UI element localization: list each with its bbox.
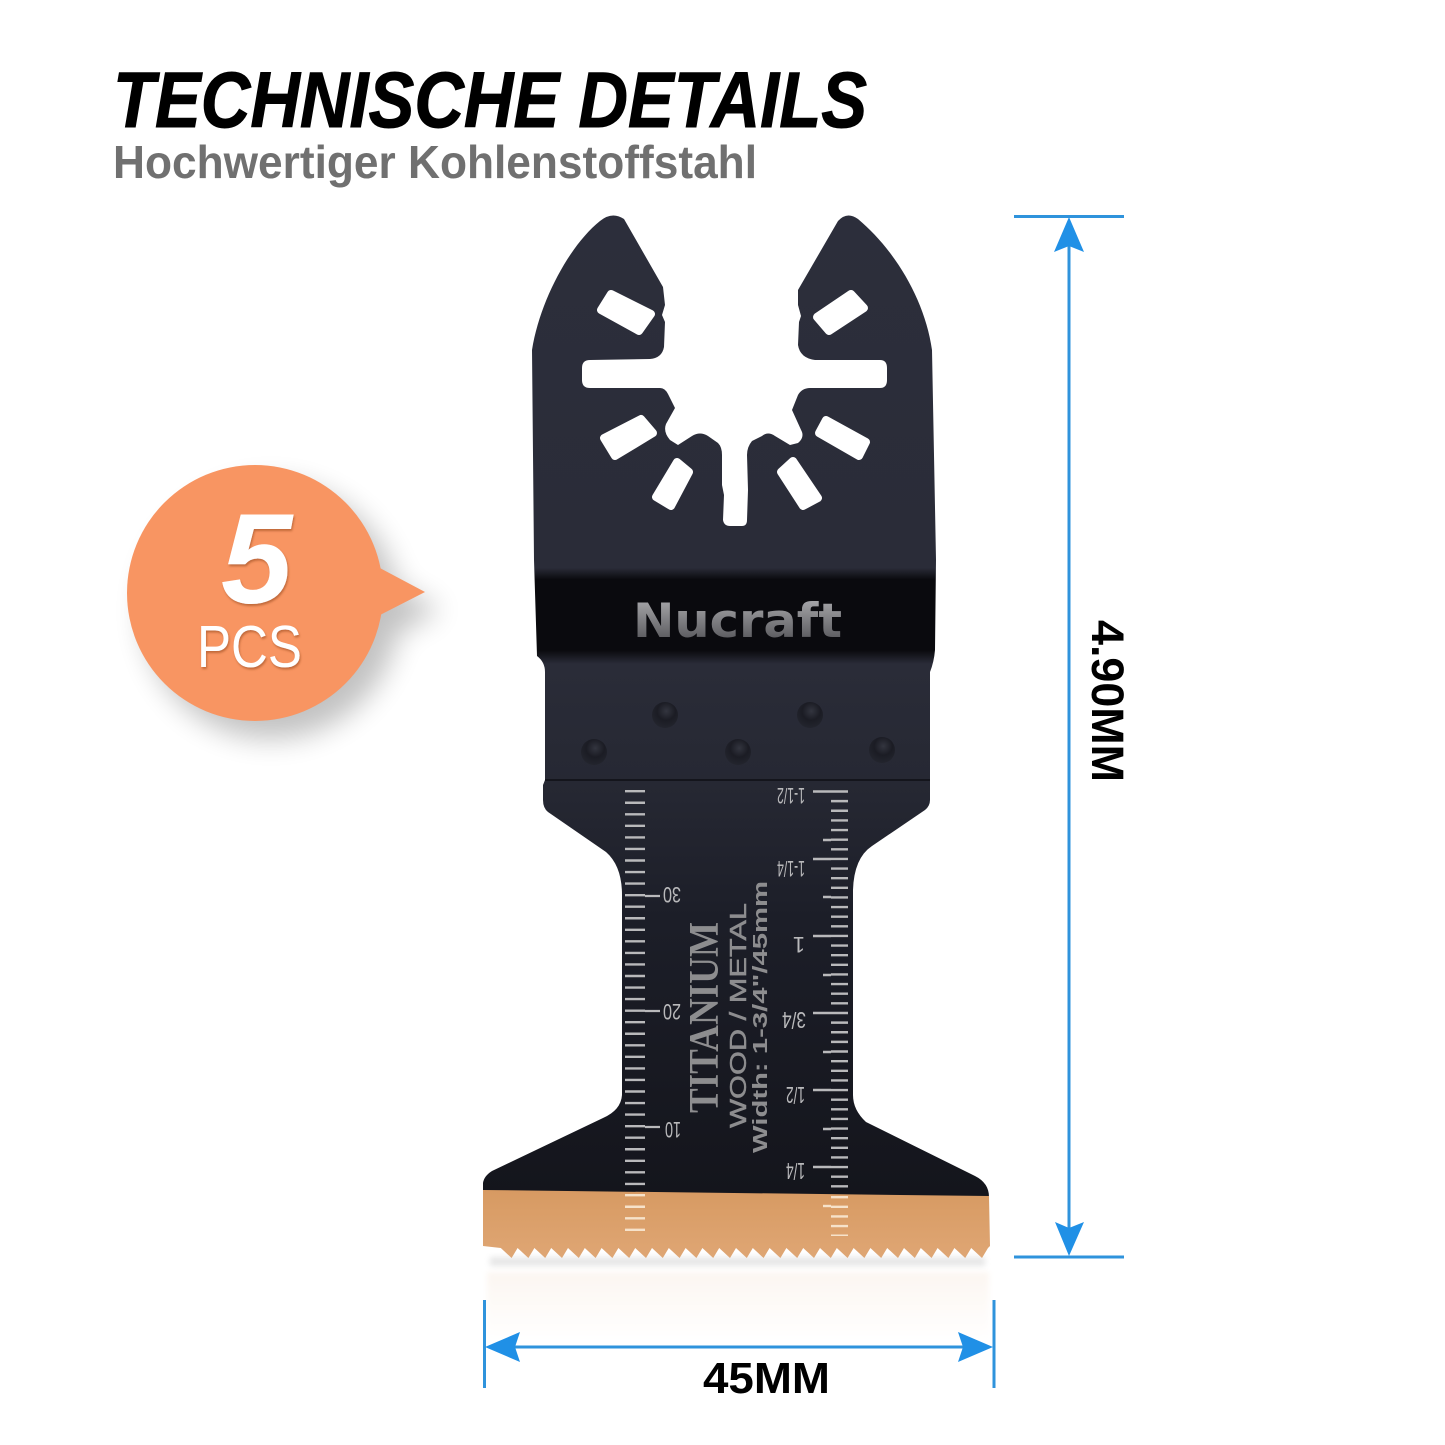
height label: 4.90MM	[1082, 620, 1133, 782]
inch ruler	[777, 783, 840, 1236]
inch ruler: 1-1/4	[777, 856, 805, 881]
inch ruler: 1	[793, 932, 805, 957]
metric ruler	[635, 790, 681, 1233]
oscillating saw blade	[483, 215, 990, 1258]
inch ruler: 1/2	[786, 1082, 805, 1108]
brand logo: Nucraft	[633, 594, 842, 649]
blade marking: width: Width: 1-3/4"/45mm	[750, 881, 772, 1153]
badge unit: PCS	[197, 614, 302, 680]
blade body	[483, 215, 989, 1197]
crease line	[545, 779, 930, 781]
inch ruler: 1-1/2	[777, 783, 805, 808]
mounting slots	[601, 294, 866, 506]
rivets	[581, 702, 895, 765]
titanium cutting edge	[483, 1190, 990, 1258]
subtitle: Hochwertiger Kohlenstoffstahl	[113, 136, 757, 188]
width dimension arrow	[484, 1300, 994, 1388]
metric ruler: 10	[665, 1117, 681, 1142]
blade reflection	[487, 1257, 989, 1342]
badge speech bubble	[127, 465, 425, 721]
blade marking: titanium: TITANIUM	[682, 922, 728, 1113]
height dimension arrow	[1014, 216, 1124, 1257]
badge number: 5	[221, 488, 294, 631]
width label: 45MM	[703, 1354, 830, 1403]
inch ruler: 3/4	[782, 1007, 806, 1033]
title: TECHNISCHE DETAILS	[113, 55, 867, 144]
inch ruler: 1/4	[786, 1158, 805, 1184]
blade marking: wood / metal: WOOD / METAL	[725, 903, 751, 1128]
metric ruler: 20	[663, 999, 681, 1024]
metric ruler: 30	[663, 882, 681, 907]
badge: 5 PCS	[127, 465, 441, 739]
